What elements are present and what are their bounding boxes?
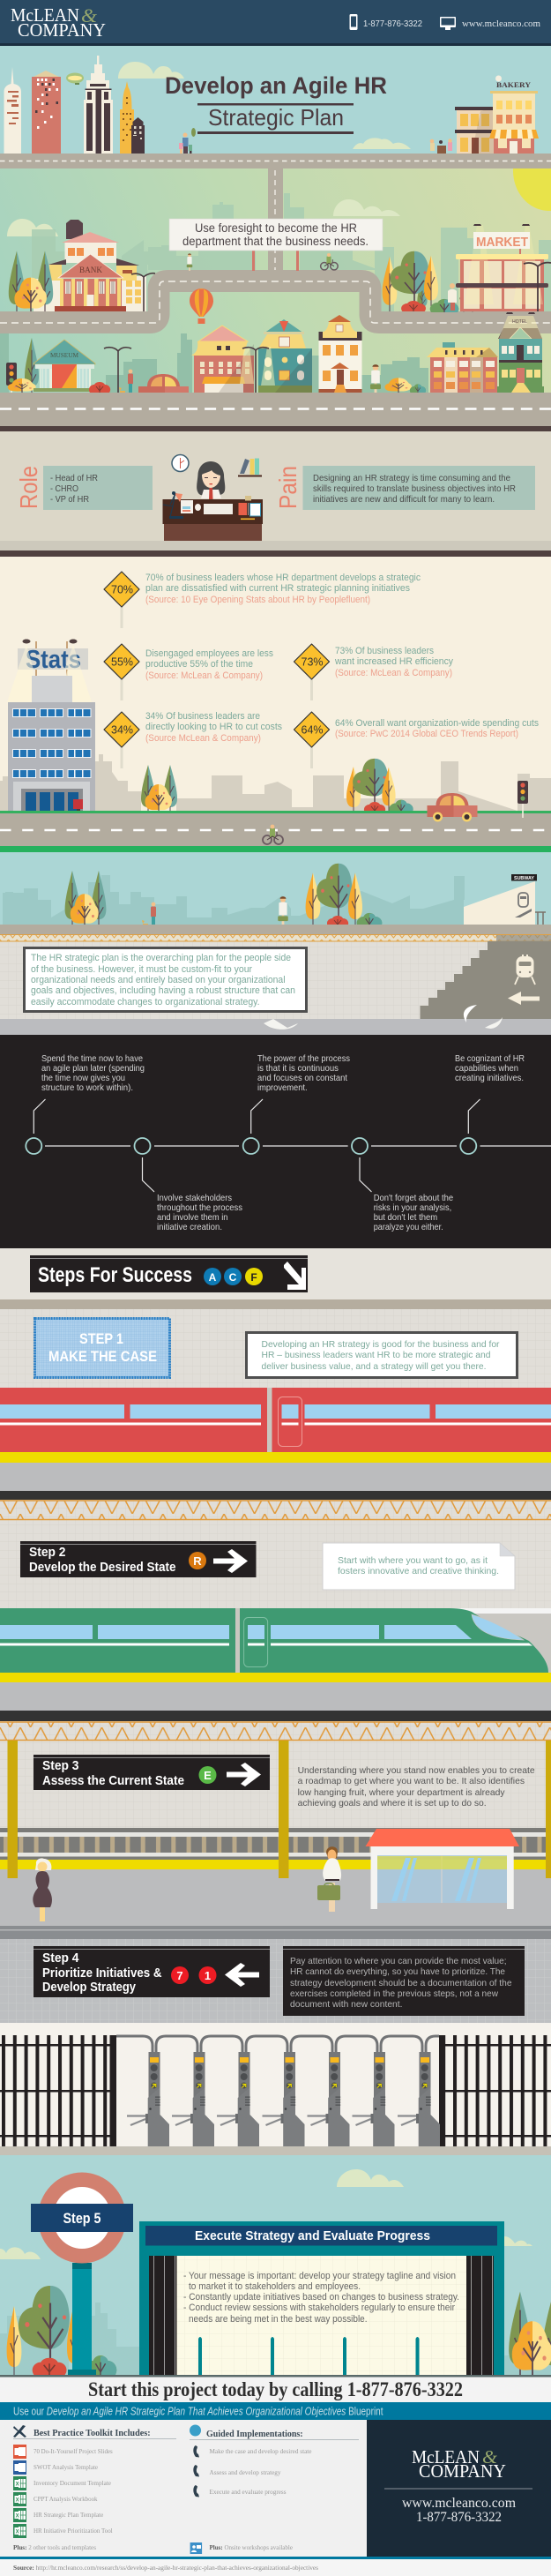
stat 73%: (Source: McLean & Company): [335, 668, 452, 678]
roundel and pole: [31, 2172, 133, 2375]
panel: step 1: [0, 1309, 551, 1491]
item: SWOT Analysis Template: [34, 2464, 98, 2471]
building: cream house: [319, 315, 361, 393]
icon: monitor: [440, 17, 456, 30]
pedestrian: [187, 253, 192, 271]
cloud: [333, 199, 400, 216]
streetlamp: [131, 273, 155, 311]
sign: step 3: [34, 1755, 270, 1790]
family figures: [179, 128, 196, 154]
cloud: [0, 2247, 41, 2259]
role list: - CHRO: [50, 483, 78, 494]
road: top: [0, 154, 551, 168]
callout: step 1: [247, 1332, 517, 1378]
person with dog: [119, 370, 133, 394]
stat 73%: 73%: [302, 655, 324, 669]
logo: COMPANY: [18, 19, 106, 41]
note 4: risks in your analysis,: [374, 1202, 451, 1213]
callout: step 2: fosters innovative and creative thinking.: [338, 1566, 499, 1576]
panel: step 3: [0, 1711, 551, 1926]
panel: timeline: [0, 1035, 551, 1248]
footer source: [0, 2557, 551, 2576]
skyline: [0, 2303, 551, 2375]
panel: step 2: [0, 1491, 551, 1711]
building: market: MARKET: [476, 235, 528, 250]
callout: step 2: Start with where you want to go, as it: [338, 1555, 488, 1566]
role list: - Head of HR: [50, 473, 98, 483]
pain text: initiatives are new and difficult for many to learn.: [313, 494, 495, 505]
note 4: paralyze you either.: [374, 1222, 443, 1232]
stat 55%: Disengaged employees are less: [145, 648, 273, 659]
callout: HR strategic plan: of the business. However, it must be custom-fit to your: [31, 964, 252, 975]
note 5: capabilities when: [455, 1063, 518, 1074]
step 5 text: - Your message is important: develop your strategy tagline and vision: [183, 2271, 456, 2281]
road: [0, 813, 551, 847]
pedestrian: [278, 896, 288, 927]
item: Inventory Document Template: [34, 2480, 111, 2487]
website: www.mcleanco.com: [402, 2496, 517, 2511]
icon: clock: [172, 455, 189, 471]
header bar: [0, 0, 551, 46]
stat 64%: [294, 712, 539, 768]
callout: step 1: HR – business leaders want HR to be more strategic and: [261, 1350, 491, 1360]
item: Make the case and develop desired state: [210, 2448, 312, 2455]
item: HR Initiative Prioritization Tool: [34, 2527, 113, 2535]
building: empire tower: [84, 56, 113, 154]
stat 34%: directly looking to HR to cut costs: [145, 722, 282, 732]
grass line: [0, 811, 551, 813]
logo: &: [81, 4, 98, 26]
logo: &: [482, 2446, 498, 2467]
sign: step 4: Prioritize Initiatives &: [42, 1966, 162, 1981]
role list: - VP of HR: [50, 494, 89, 505]
turnstile 1: [127, 2052, 169, 2146]
note 3: The power of the process: [257, 1053, 350, 1064]
streetlamp: [104, 348, 131, 393]
turnstile 6: [353, 2052, 395, 2146]
building: dark tower: [131, 117, 145, 154]
sign: step 2: [20, 1541, 256, 1577]
trees: right: [509, 2292, 551, 2375]
sign: step 4: [34, 1946, 270, 1997]
traffic light: [6, 363, 17, 400]
stat 73%: 73% Of business leaders: [335, 646, 434, 656]
stat 64%: 64%: [302, 723, 324, 736]
tree: [19, 2286, 70, 2375]
plus note: Plus: 2 other tools and templates: [13, 2544, 96, 2551]
icon: word: [13, 2460, 26, 2475]
stat 70%: (Source: 10 Eye Opening Stats about HR by Peoplefluent): [145, 595, 370, 605]
sign: step 3: Step 3: [42, 1758, 79, 1773]
sign: step 4: Step 4: [42, 1951, 79, 1966]
platform: [0, 1682, 551, 1711]
panel: street and subway entrance: [0, 846, 551, 1035]
desk: [162, 491, 263, 541]
note 2: and involve them in: [157, 1212, 228, 1223]
step 5 text: - Constantly update initiatives based on changes to business strategy.: [183, 2292, 459, 2303]
person with dog: [142, 902, 156, 927]
panel: contact: [367, 2420, 551, 2557]
icon: excel: [13, 2476, 26, 2490]
subway board: Execute Strategy and Evaluate Progress: [195, 2228, 430, 2243]
building: bakery: BAKERY: [496, 81, 531, 89]
building: bank: BANK: [79, 266, 102, 274]
building: red house: [191, 326, 254, 393]
man with bag: [317, 1846, 341, 1912]
cloud: [118, 62, 184, 79]
heading: toolkit: Best Practice Toolkit Includes:: [34, 2429, 151, 2438]
sign: steps for success: F: [250, 1271, 257, 1284]
road: winding loop: [0, 281, 551, 323]
trees: [306, 864, 382, 926]
truss: [0, 1501, 551, 1520]
blimp: [66, 72, 84, 85]
traffic light: [517, 781, 528, 818]
sign: step 4: 7: [176, 1969, 183, 1982]
panel: steps heading: [0, 1248, 551, 1309]
building: brownstone: [455, 107, 494, 154]
callout: step 2: [323, 1543, 515, 1590]
trees: [141, 765, 177, 812]
pain text: skills required to translate business objectives into HR: [313, 483, 516, 494]
stat 34%: 34% Of business leaders are: [145, 711, 260, 722]
note 3: improvement.: [257, 1082, 308, 1093]
step 4 text panel: [283, 1946, 525, 2016]
cyclist: [263, 825, 283, 844]
call to action: Start this project today by calling 1-877-876-3322: [88, 2378, 463, 2400]
floor: [0, 1019, 551, 1035]
platform: [0, 1869, 551, 1926]
turnstile 3: [217, 2052, 259, 2146]
sign: step 2: Develop the Desired State: [29, 1560, 176, 1575]
building: hotel: [497, 312, 544, 393]
timeline track: [26, 1099, 551, 1192]
note 1: an agile plan later (spending: [41, 1063, 145, 1074]
pedestrian: [370, 364, 381, 395]
building: row houses: [427, 342, 498, 393]
person at desk: [197, 461, 225, 499]
note 5: creating initiatives.: [455, 1073, 524, 1083]
yellow platform edge: [0, 1452, 551, 1463]
woman in dress: [33, 1858, 52, 1921]
scattered papers: [264, 1005, 503, 1030]
car: [427, 793, 478, 822]
cloud small: [353, 138, 411, 149]
road: billboard spur: [268, 168, 283, 273]
note 4: but don't let them: [374, 1212, 437, 1223]
sign: steps for success: [30, 1255, 308, 1292]
step 3 text: [298, 1765, 535, 1808]
stat 70%: [104, 572, 421, 628]
panel: sky with skyline and title: [0, 46, 551, 168]
panel: city with foresight billboard: [0, 168, 551, 402]
step 4 text panel: strategy development should be a documentation of the: [290, 1978, 512, 1988]
panel: stats: [0, 557, 551, 847]
billboard: [169, 219, 383, 271]
callout: HR strategic plan: [25, 947, 307, 1011]
step 4 text panel: HR cannot do everything, so you have to prioritize. The: [290, 1966, 505, 1977]
logo: [412, 2446, 506, 2482]
building: yellow deco tower: [120, 81, 134, 154]
subway entrance: [464, 874, 546, 925]
icon: phone: [193, 2465, 199, 2477]
stat 34%: (Source McLean & Company): [145, 733, 261, 744]
pillars: [7, 1741, 551, 1878]
stat 55%: [104, 644, 273, 700]
building: hotel: HOTEL: [512, 319, 527, 325]
platform: [0, 1463, 551, 1491]
shelf with binders: [238, 459, 262, 476]
building: teal house: [258, 319, 312, 393]
icon: workshop: [190, 2542, 202, 2554]
panel: turnstiles and fence: [0, 2023, 551, 2155]
panel: step 4: [0, 1926, 551, 2023]
skyline upper: [32, 193, 551, 311]
stat 55%: 55%: [111, 655, 133, 669]
subway entrance: SUBWAY: [514, 876, 535, 881]
tree and bush: museum: [8, 338, 39, 393]
note 3: [257, 1053, 350, 1093]
stat 70%: 70% of business leaders whose HR department develops a strategic: [145, 573, 421, 583]
item: Execute and evaluate progress: [210, 2489, 287, 2496]
arrow: left: [508, 992, 540, 1005]
skyline: [0, 754, 551, 813]
blueprint banner: Use our Develop an Agile HR Strategic Plan That Achieves Organizational Objectives Blueprint: [13, 2405, 383, 2417]
billboard: department that the business needs.: [182, 235, 369, 248]
callout: step 1: deliver business value, and a strategy will get you there.: [261, 1361, 487, 1372]
stat 55%: (Source: McLean & Company): [145, 670, 263, 681]
note 1: the time now gives you: [41, 1073, 125, 1083]
trees: bank: [9, 251, 53, 311]
note 2: throughout the process: [157, 1202, 242, 1213]
green train: [0, 1608, 551, 1673]
note 1: structure to work within).: [41, 1082, 133, 1093]
building: bakery: [489, 76, 539, 154]
streetlamp with beam: [240, 347, 275, 393]
mosaic: step 1: STEP 1: [79, 1330, 123, 1347]
tree: [7, 2306, 21, 2375]
blueprint banner: [0, 2402, 551, 2420]
website: www.mcleanco.com: [462, 19, 540, 29]
logo: [11, 4, 106, 41]
stat 70%: plan are dissatisfied with current HR strategic planning initiatives: [145, 583, 410, 594]
turnstile 5: [307, 2052, 349, 2146]
heading: guided implementations: Guided Implementations:: [206, 2430, 303, 2439]
trees behind pole: [33, 2303, 116, 2375]
item: CPPT Analysis Workbook: [34, 2496, 98, 2503]
note 4: [374, 1193, 453, 1232]
sign: step 4: Develop Strategy: [42, 1980, 137, 1995]
step 3 text: a roadmap to get where you want to be. It also identifies: [298, 1776, 525, 1786]
call to action: [0, 2375, 551, 2402]
callout: HR strategic plan: organizational needs and entirely based on your organizational: [31, 975, 286, 985]
icon: powerpoint: [13, 2445, 26, 2459]
cloud: [337, 2169, 404, 2187]
icon: excel: [13, 2492, 26, 2506]
sun: [513, 168, 551, 211]
subway board: [139, 2221, 504, 2375]
cafe figures: [430, 139, 452, 154]
skyline: [3, 875, 465, 925]
turnstile arches: [116, 2036, 439, 2054]
bush: [89, 382, 110, 393]
shopper with cart: [448, 283, 476, 311]
mosaic: step 1: MAKE THE CASE: [48, 1348, 157, 1365]
step 5 text: to market it to stakeholders and employees.: [189, 2281, 361, 2292]
building: red tower: [32, 71, 61, 154]
yellow platform edge: [0, 1860, 551, 1869]
item: 70 Do-It-Yourself Project Slides: [34, 2448, 113, 2455]
note 2: initiative creation.: [157, 1222, 222, 1232]
yellow platform edge: [0, 1673, 551, 1683]
step 4 text panel: exercises completed in the previous steps, not a new: [290, 1988, 498, 1999]
stat 64%: (Source: PwC 2014 Global CEO Trends Report): [335, 729, 518, 739]
phone number: 1-877-876-3322: [363, 19, 422, 29]
building: market: [456, 224, 551, 311]
road: [0, 925, 551, 934]
sign: steps for success: C: [229, 1271, 237, 1284]
note 1: [41, 1053, 145, 1093]
item: HR Strategic Plan Template: [34, 2512, 103, 2519]
note 2: [157, 1193, 242, 1232]
sign: step 2: R: [193, 1554, 202, 1568]
building: museum: MUSEUM: [50, 351, 78, 359]
billboard sign: stats: Stats: [26, 646, 81, 674]
icon: phone: [349, 14, 358, 30]
panel: role and pain: [0, 426, 551, 557]
building: white tower: [4, 67, 21, 154]
cyclist: [321, 253, 338, 270]
heading: pain: Pain: [274, 466, 302, 509]
note 1: Spend the time now to have: [41, 1053, 143, 1064]
trees: [346, 759, 413, 812]
red train: [0, 1388, 551, 1452]
note 3: is that it is continuous: [257, 1063, 339, 1074]
billboard sign: stats: [7, 639, 92, 702]
callout: HR strategic plan: easily accommodate changes to organizational strategy.: [31, 997, 259, 1007]
icon: guided implementation: [190, 2424, 201, 2437]
sign: step 3: E: [204, 1769, 212, 1782]
car: [138, 374, 189, 402]
logo: COMPANY: [419, 2460, 506, 2482]
icon: tools: [13, 2425, 26, 2437]
sign: steps for success: Steps For Success: [38, 1263, 192, 1287]
step 3 text: achieving goals and where it is set up to do so.: [298, 1798, 487, 1808]
pain text: Designing an HR strategy is time consuming and the: [313, 473, 510, 483]
stat 34%: [104, 711, 282, 768]
heading: role: Role: [15, 466, 42, 509]
mosaic: step 1: [35, 1318, 169, 1378]
truss: [0, 1722, 551, 1741]
icon: phone: [193, 2485, 199, 2497]
title: Develop an Agile HR: [165, 72, 387, 99]
title: Strategic Plan: [208, 104, 344, 131]
callout: HR strategic plan: goals and objectives, including having a robust structure that can: [31, 985, 295, 996]
icon: phone: [193, 2445, 199, 2458]
callout: step 1: Developing an HR strategy is good for the business and for: [261, 1339, 500, 1350]
step 3 text: low hanging fruit, where your department is already: [298, 1787, 505, 1798]
building: stats office: [8, 676, 95, 813]
stat 34%: 34%: [111, 723, 133, 736]
trees: [65, 871, 106, 926]
step 5 text: - Conduct review sessions with stakeholders regularly to ensure their: [183, 2303, 455, 2313]
shelter: [365, 1829, 519, 1909]
step 5 text: [183, 2271, 459, 2325]
item: Assess and develop strategy: [210, 2469, 281, 2476]
wall tile: [0, 941, 551, 1019]
icon: excel: [13, 2508, 26, 2522]
sign: step 3: Assess the Current State: [42, 1773, 184, 1788]
stat 73%: [294, 644, 453, 700]
stat 64%: 64% Overall want organization-wide spending cuts: [335, 718, 539, 729]
billboard: Use foresight to become the HR: [195, 221, 357, 235]
icon: train: [515, 955, 535, 985]
step 3 text: Understanding where you stand now enables you to create: [298, 1765, 535, 1776]
phone number: 1-877-876-3322: [416, 2510, 502, 2525]
turnstile 7: [398, 2052, 440, 2146]
sign: step 4: 1: [205, 1969, 211, 1982]
building: museum: [34, 340, 95, 392]
note 3: and focuses on constant: [257, 1073, 347, 1083]
footer source: Source: http://hr.mcleanco.com/research/ss/develop-an-agile-hr-strategic-plan-that-achieves-organizational-objectives: [13, 2565, 318, 2572]
step 4 text panel: Pay attention to where you can provide the most value;: [290, 1956, 506, 1966]
panel: step 5: [0, 2155, 551, 2375]
cloud: [7, 219, 58, 236]
callout: HR strategic plan: The HR strategic plan is the overarching plan for the people side: [31, 953, 291, 963]
logo: McLEAN: [11, 4, 79, 26]
sign: step 5: [31, 2204, 133, 2232]
turnstile 2: [172, 2052, 214, 2146]
panel: toolkit list: [0, 2420, 367, 2557]
stairs: [420, 941, 551, 1019]
turnstile 4: [263, 2052, 305, 2146]
stat 70%: 70%: [111, 582, 133, 596]
sign: step 5: Step 5: [63, 2210, 101, 2227]
building: bank: [34, 220, 146, 311]
logo: McLEAN: [412, 2446, 480, 2467]
step 5 text: needs are being met in the best way possible.: [189, 2314, 367, 2325]
note 5: [455, 1053, 525, 1083]
title: [165, 72, 387, 134]
note 2: Involve stakeholders: [157, 1193, 232, 1203]
road: lower street: [0, 393, 551, 426]
sign: steps for success: A: [209, 1271, 217, 1284]
fence: right: [439, 2035, 551, 2146]
hot air balloon: [190, 288, 213, 324]
trees: right: [383, 251, 458, 312]
icon: excel: [13, 2524, 26, 2538]
skyline lower: [0, 311, 428, 393]
plus note: Plus: Onsite workshops available: [210, 2544, 293, 2551]
truss: [0, 934, 551, 941]
stat 73%: want increased HR efficiency: [334, 656, 453, 667]
pain text: [303, 466, 535, 510]
role list: [43, 466, 153, 510]
note 4: Don't forget about the: [374, 1193, 453, 1203]
bushes: [385, 378, 426, 393]
sign: step 2: Step 2: [29, 1545, 65, 1560]
fence: left: [0, 2035, 116, 2146]
note 5: Be cognizant of HR: [455, 1053, 525, 1064]
step 4 text panel: document with new content.: [290, 1999, 402, 2010]
tracks: [0, 1828, 551, 1860]
cloud: [504, 2236, 532, 2246]
stat 55%: productive 55% of the time: [145, 659, 253, 670]
